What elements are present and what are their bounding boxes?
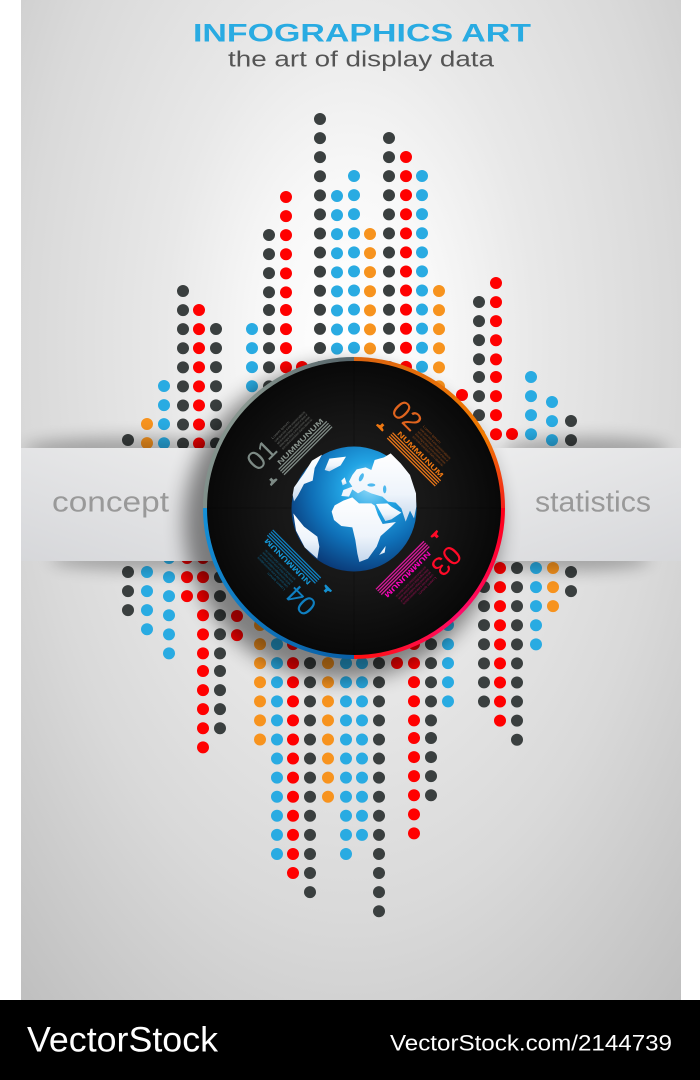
callout 03: 03 — [425, 539, 468, 582]
callout 03: dolore magna aliqua ut enim ad minim veniam — [397, 568, 430, 601]
footer url: VectorStock.com/2144739 — [390, 1030, 672, 1056]
callout 03: quis nostrud exercitation ullamco laboris nisi — [395, 566, 427, 598]
land: Madagascar — [379, 546, 386, 555]
callout 04: NUMMUNUM — [264, 536, 313, 585]
land: Greenland — [325, 457, 346, 471]
icon: globe — [292, 446, 416, 572]
callout 03: sed do eiusmod tempor incididunt ut labore et — [400, 571, 432, 603]
callout 02: dolore magna aliqua ut enim ad minim veniam — [414, 432, 447, 465]
lower dark dots — [128, 568, 571, 912]
upper red dots — [199, 157, 512, 444]
land: South America — [293, 513, 319, 559]
ring segment: red — [354, 508, 503, 657]
ring segment: orange — [354, 359, 503, 508]
footer bar — [0, 1000, 700, 1080]
callout 01: quis nostrud exercitation ullamco laboris nisi — [281, 418, 313, 450]
ring segment: blue — [205, 508, 354, 657]
disc shadow — [184, 364, 500, 680]
label: statistics: statistics — [535, 486, 651, 518]
callout 02: quis nostrud exercitation ullamco laboris nisi — [412, 435, 444, 467]
sea: inland waters — [358, 473, 386, 493]
footer logo: VectorStock — [27, 1020, 218, 1060]
callout 04: sed do eiusmod tempor incididunt ut labore et — [259, 554, 291, 586]
callout 03: NUMMUNUM — [382, 549, 431, 598]
callout 04: quis nostrud exercitation ullamco laboris nisi — [264, 549, 296, 581]
callout 02 — [375, 394, 467, 486]
land: Arabia — [376, 503, 401, 521]
lower red dots — [187, 558, 500, 874]
callout 01: 01 — [240, 434, 283, 477]
ring segment: grey — [205, 359, 354, 508]
callout 02: 02 — [385, 394, 428, 437]
callout 03: Lorem ipsum — [417, 576, 437, 596]
subtitle: the art of display data — [228, 46, 495, 72]
band shadows — [23, 437, 670, 571]
callout 02: Lorem ipsum dolor sit amet consectetur adipiscing — [419, 427, 452, 460]
callout 03 — [376, 529, 468, 621]
callout 04: Lorem ipsum dolor sit amet consectetur adipiscing — [256, 556, 289, 589]
callout 01: dolore magna aliqua ut enim ad minim veniam — [278, 415, 311, 448]
upper orange dots — [147, 234, 439, 444]
land: North America — [293, 455, 322, 501]
land: Eurasia — [341, 453, 416, 522]
panel: ribbon band — [21, 448, 681, 561]
callout 04: dolore magna aliqua ut enim ad minim veniam — [261, 551, 294, 584]
callout 01: Lorem ipsum dolor sit amet consectetur adipiscing — [273, 410, 306, 443]
land: Africa — [332, 497, 396, 562]
label: concept: concept — [52, 486, 169, 518]
land: British Isles — [341, 477, 347, 485]
upper dark dots — [128, 119, 571, 444]
callout 01: sed do eiusmod tempor incididunt ut labore et — [276, 413, 308, 445]
callout 01: NUMMUNUM — [277, 418, 326, 467]
callout 01 — [240, 395, 332, 487]
callout 02: NUMMUNUM — [395, 431, 444, 480]
callout 04 — [241, 530, 333, 622]
dot equalizer chart — [128, 119, 571, 912]
callout 02: Lorem ipsum — [422, 425, 442, 445]
lower orange dots — [260, 568, 553, 798]
upper blue dots — [164, 176, 552, 444]
callout 03: Lorem ipsum dolor sit amet consectetur adipiscing — [402, 573, 435, 606]
callout 04: Lorem ipsum — [266, 571, 286, 591]
title: INFOGRAPHICS ART — [193, 20, 531, 48]
panel: black disc — [205, 359, 503, 657]
callout 04: 04 — [280, 579, 323, 622]
callout 01: Lorem ipsum — [271, 420, 291, 440]
callout 02: sed do eiusmod tempor incididunt ut labore et — [417, 430, 449, 462]
lower blue dots — [147, 558, 536, 855]
